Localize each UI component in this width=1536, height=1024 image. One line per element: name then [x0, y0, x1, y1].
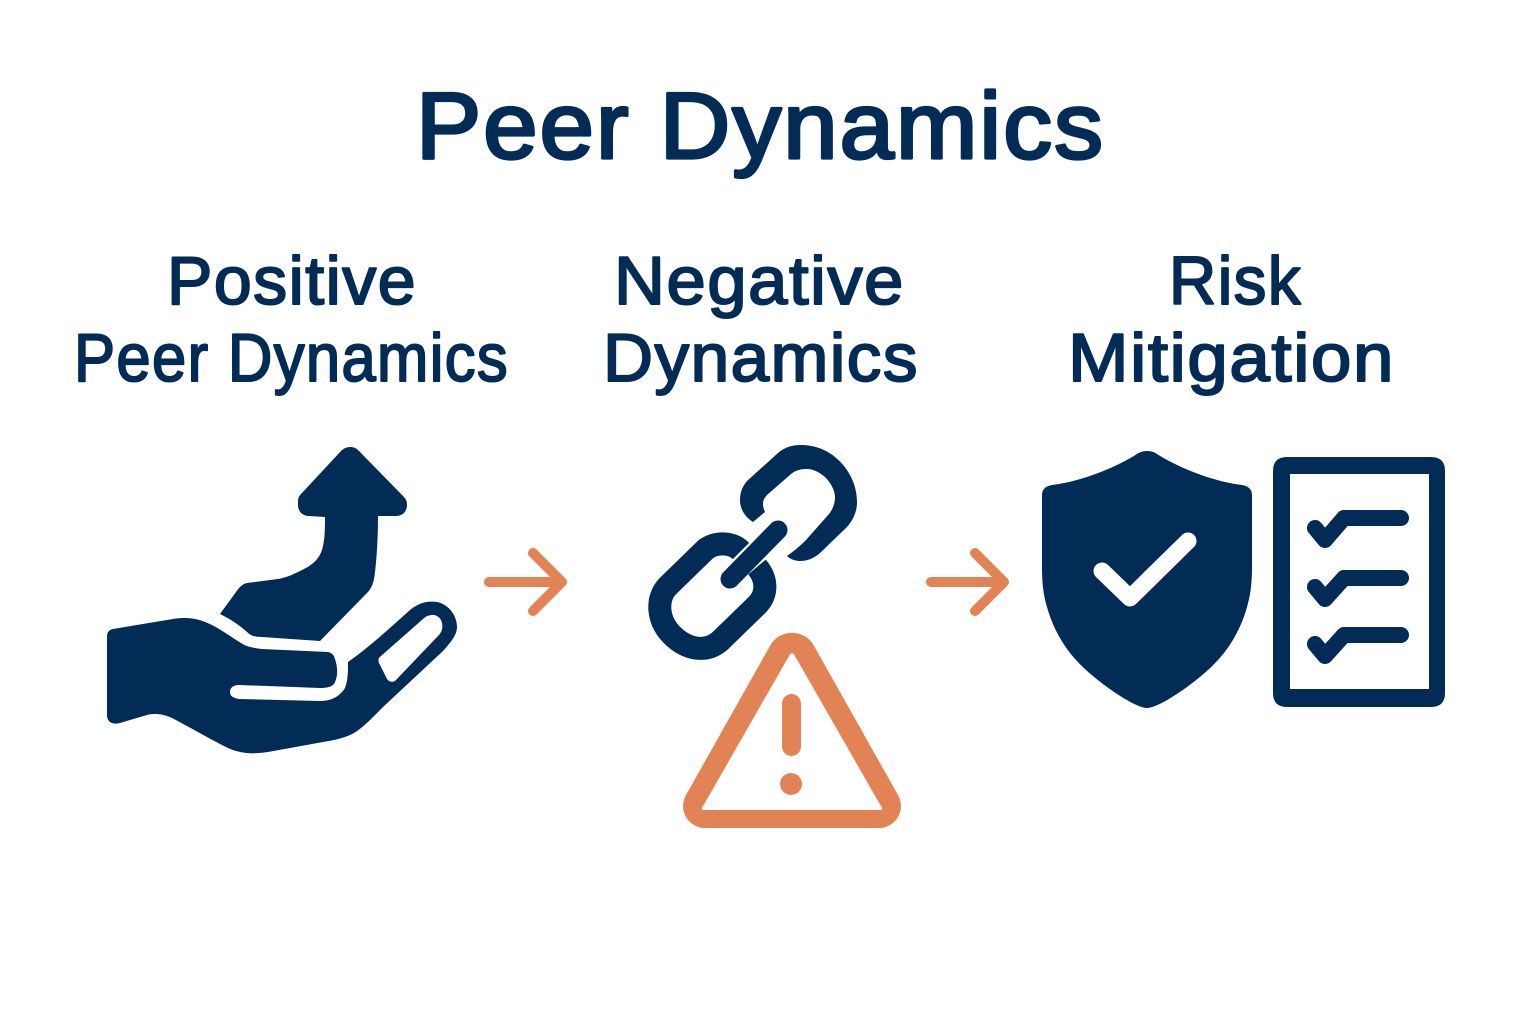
arrow: positive to negative	[489, 553, 562, 611]
icon: checklist	[1273, 457, 1445, 707]
heading: negative dynamics	[603, 243, 919, 396]
panel: negative dynamics	[603, 243, 919, 828]
icon: warning triangle	[683, 633, 901, 828]
panel: risk mitigation	[1042, 243, 1445, 708]
heading: risk mitigation: Risk	[1169, 243, 1302, 319]
icon: hand lifting upward arrow	[107, 447, 457, 753]
heading: positive peer dynamics: Positive	[167, 243, 417, 319]
heading: positive peer dynamics	[74, 243, 509, 396]
heading: risk mitigation: Mitigation	[1068, 320, 1395, 396]
icon: shield with check	[1042, 451, 1252, 708]
icon: broken chain link	[660, 445, 857, 648]
title: Peer Dynamics	[416, 73, 1105, 178]
arrow: negative to risk mitigation	[931, 553, 1004, 611]
heading: negative dynamics: Dynamics	[603, 320, 919, 396]
heading: negative dynamics: Negative	[614, 243, 905, 319]
heading: positive peer dynamics: Peer Dynamics	[74, 320, 509, 396]
panel: positive peer dynamics	[74, 243, 509, 753]
heading: risk mitigation	[1068, 243, 1395, 396]
